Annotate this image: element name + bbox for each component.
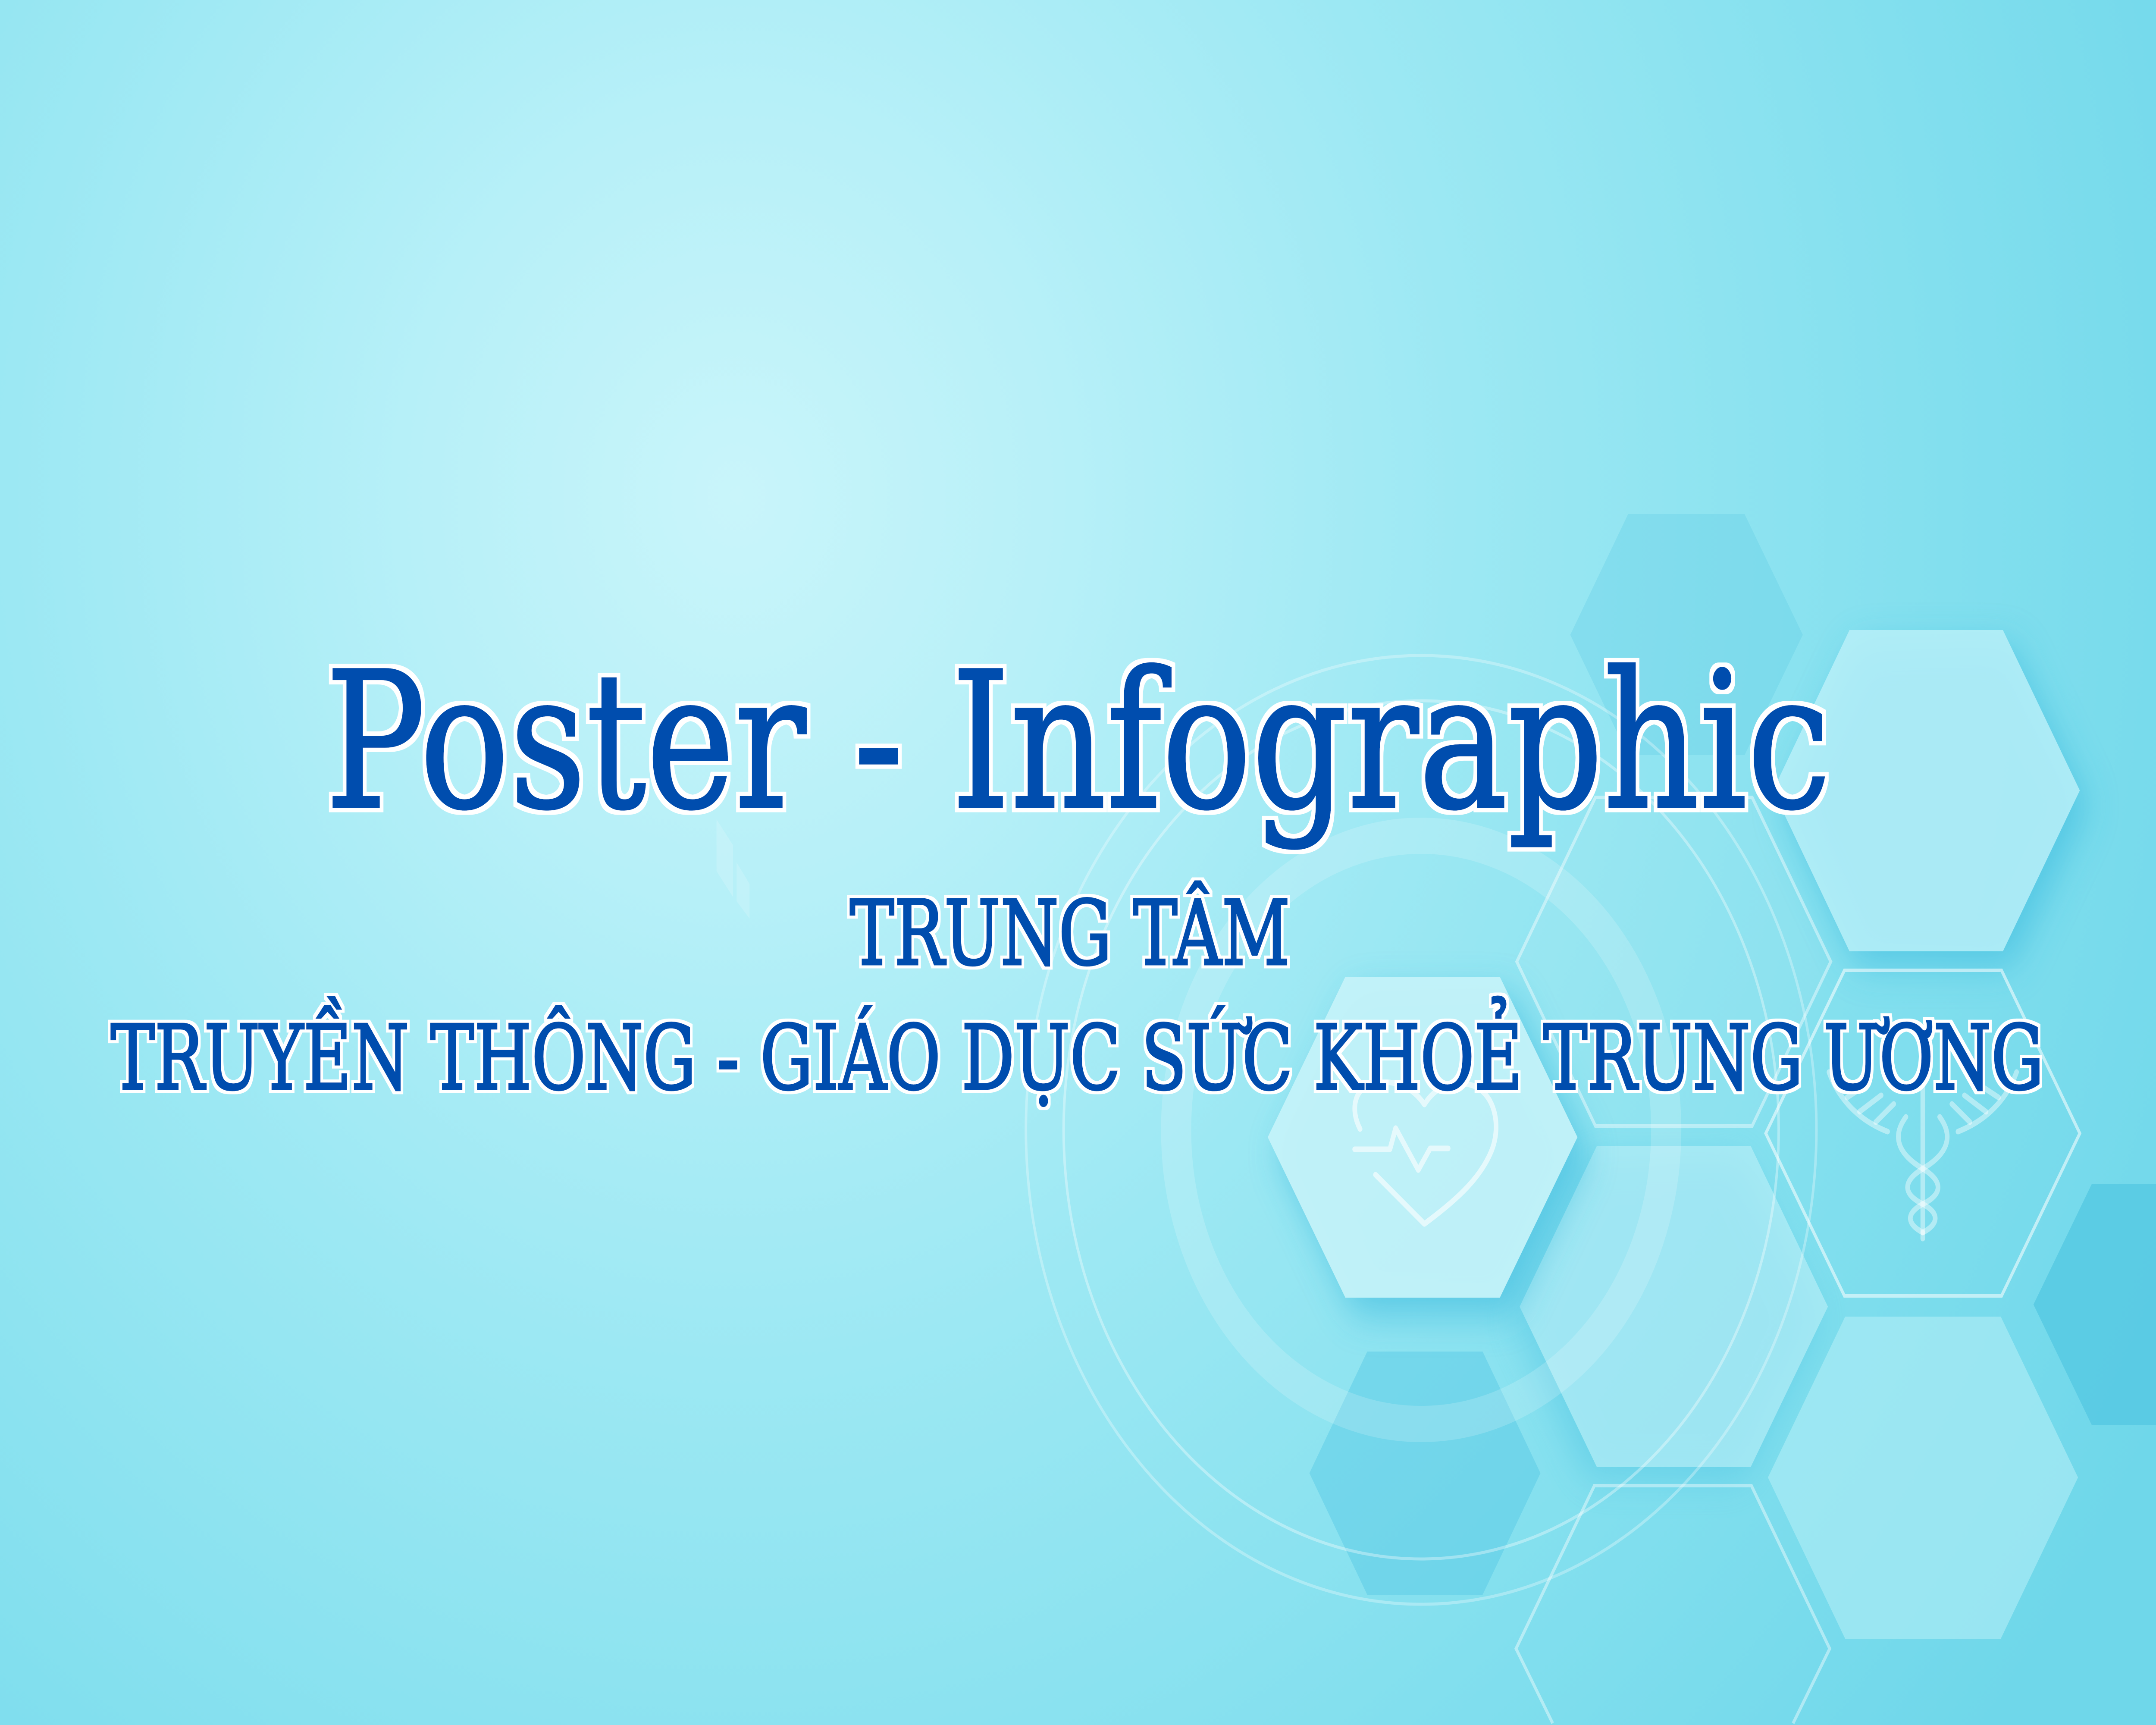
hexagon: dark right edge [2034, 1184, 2156, 1425]
hexagon outline: caduceus panel [1766, 970, 2080, 1296]
icon: heart with pulse [1355, 1082, 1496, 1224]
hexagon: light lower right [1768, 1317, 2078, 1639]
hexagon: heart panel [1268, 977, 1588, 1315]
hexagon outline: upper middle [1517, 797, 1831, 1126]
hexagon: dark lower middle [1310, 1352, 1540, 1595]
hexagon: light lower middle [1510, 1146, 1828, 1480]
concentric rings [1026, 656, 1816, 1604]
faint background mark [717, 819, 749, 919]
hexagon: light upper right [1773, 630, 2089, 966]
hexagon outline: bottom [1516, 1486, 1830, 1723]
title: Poster - Infographic [325, 632, 1831, 852]
subtitle line 1: TRUNG TÂM [850, 881, 1290, 985]
icon: caduceus [1829, 1052, 2017, 1239]
hexagon: dark upper [1570, 514, 1803, 755]
